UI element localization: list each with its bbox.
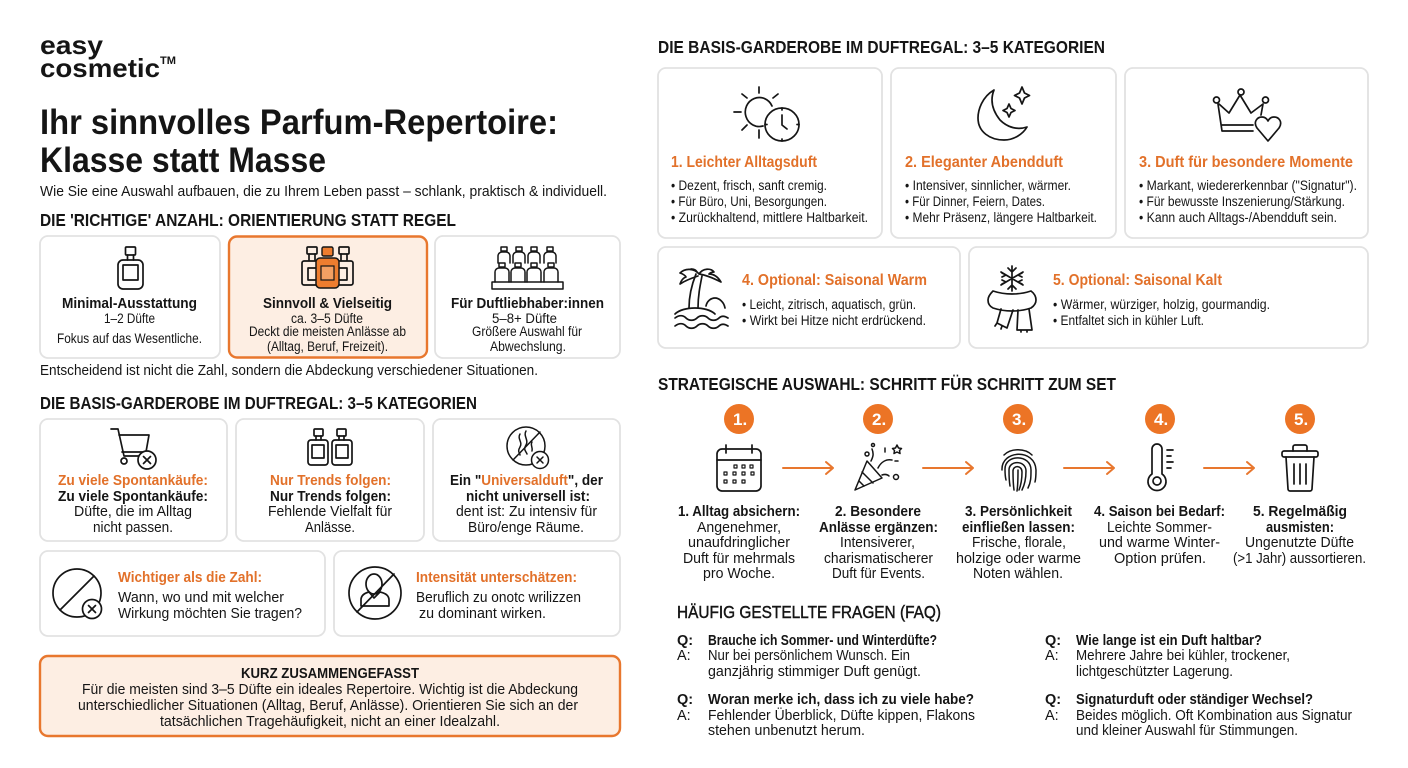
text: spontankaeufe (58, 472, 208, 536)
faq: zu viele: Fehlender Überblick, Düfte kippen, Flakons (708, 706, 975, 724)
text: duftliebhaber title: Für Duftliebhaber:innen (451, 295, 604, 312)
text: universalduft: Büro/enge Räume. (468, 520, 584, 536)
faq: signaturduft: und kleiner Auswahl für Stimmungen. (1076, 723, 1298, 739)
text: wichtiger: Wichtiger als die Zahl: (118, 569, 262, 586)
text: alltagsduft: • Für Büro, Uni, Besorgungen. (671, 194, 827, 209)
text: duftliebhaber description: Abwechslung. (490, 339, 566, 354)
text: universalduft (450, 472, 603, 536)
text: step 5: ausmisten: (1266, 519, 1334, 536)
text: intensitaet (416, 569, 581, 622)
text: step 5: Ungenutzte Düfte (1245, 535, 1354, 551)
title: Ihr sinnvolles Parfum-Repertoire: (40, 103, 558, 142)
panel: sinnvoll und vielseitig (229, 236, 427, 358)
text: abendduft (905, 154, 1097, 225)
panel: intensitaet unterschaetzen (334, 551, 620, 636)
text: step 2: Duft für Events. (832, 566, 925, 582)
icon: slashed person (349, 567, 401, 619)
text: step 1: Duft für mehrmals (683, 551, 795, 567)
icon: shopping cart with x (111, 429, 156, 469)
step 5 (1233, 404, 1366, 567)
icon: crossed scent waves (507, 427, 548, 468)
text: abendduft: • Intensiver, sinnlicher, wärmer. (905, 178, 1071, 193)
text: abendduft: • Mehr Präsenz, längere Haltbarkeit. (905, 210, 1097, 225)
text: step 3 (956, 503, 1081, 582)
text: warm: 4. Optional: Saisonal Warm (742, 272, 927, 289)
faq: sommer und winter: Nur bei persönlichem Wunsch. Ein (708, 648, 910, 664)
text: spontankaeufe: nicht passen. (93, 520, 173, 536)
icon: two bottles (308, 429, 352, 465)
faq: haltbarkeit: Mehrere Jahre bei kühler, trockener, (1076, 648, 1290, 664)
text: step 4: 4. Saison bei Bedarf: (1094, 503, 1225, 520)
faq: signaturduft: A: (1045, 708, 1059, 724)
text: spontankaeufe: Zu viele Spontankäufe: (58, 488, 208, 505)
faq: sommer und winter: ganzjährig stimmiger Duft genügt. (708, 664, 921, 680)
heading: basis-garderobe links: DIE BASIS-GARDEROBE IM DUFTREGAL: 3–5 KATEGORIEN (40, 393, 477, 413)
icon: calendar (717, 445, 761, 491)
text: duftliebhaber description: Größere Auswahl für (472, 324, 582, 339)
faq: sommer und winter: A: (677, 648, 691, 664)
faq: signaturduft: Signaturduft oder ständiger Wechsel? (1076, 692, 1313, 708)
text: alltagsduft: 1. Leichter Alltagsduft (671, 154, 817, 171)
text: warm: • Wirkt bei Hitze nicht erdrückend. (742, 313, 926, 328)
text: universalduft: Ein "Universalduft", der (450, 472, 603, 489)
text: step 3: einfließen lassen: (962, 519, 1075, 536)
faq: zu viele: A: (677, 708, 691, 724)
text: step 2 (819, 503, 938, 582)
badge 2: 2. (872, 410, 886, 429)
text: intensitaet: zu dominant wirken. (419, 606, 546, 622)
text: step 3: 3. Persönlichkeit (965, 503, 1072, 520)
logo: easy cosmetic: cosmetic (40, 53, 160, 83)
faq: signaturduft (1045, 692, 1352, 739)
heading: basis-garderobe rechts: DIE BASIS-GARDEROBE IM DUFTREGAL: 3–5 KATEGORIEN (658, 37, 1105, 57)
heading: strategische auswahl: STRATEGISCHE AUSWAHL: SCHRITT FÜR SCHRITT ZUM SET (658, 374, 1116, 394)
text: alltagsduft (671, 154, 868, 225)
panel: kurz zusammengefasst (40, 656, 620, 736)
icon: bottle shelf (492, 247, 563, 289)
title: Klasse statt Masse (40, 141, 326, 180)
faq: zu viele: Q: (677, 692, 693, 708)
icon: crown and heart (1214, 89, 1281, 141)
panel: duft fuer besondere momente (1125, 68, 1368, 238)
panel: spontankaeufe (40, 419, 227, 541)
badge 2 (863, 404, 893, 434)
arrow 1 (783, 462, 833, 474)
logo: easy cosmetic: easy (40, 30, 104, 60)
text: sinnvoll count: ca. 3–5 Düfte (291, 311, 363, 326)
text: nur trends: Fehlende Vielfalt für (268, 504, 392, 520)
heading: faq: HÄUFIG GESTELLTE FRAGEN (FAQ) (677, 602, 941, 622)
panel: minimal-ausstattung (40, 236, 220, 358)
faq: zu viele: Woran merke ich, dass ich zu viele habe? (708, 692, 974, 708)
faq: zu viele: stehen unbenutzt herum. (708, 723, 865, 739)
icon: fingerprint (1002, 450, 1036, 491)
text: step 4: und warme Winter- (1099, 535, 1220, 551)
text: minimal count: 1–2 Düfte (104, 311, 155, 326)
text: spontankaeufe: Düfte, die im Alltag (74, 504, 192, 520)
faq: zu viele (677, 692, 975, 739)
text: sinnvoll description: Deckt die meisten Anlässe ab (249, 324, 406, 339)
text: nur trends (268, 472, 392, 536)
heading: die richtige anzahl: DIE 'RICHTIGE' ANZAHL: ORIENTIERUNG STATT REGEL (40, 210, 456, 230)
faq: sommer und winter: Brauche ich Sommer- und Winterdüfte? (708, 633, 937, 649)
faq: haltbarkeit: Wie lange ist ein Duft haltbar? (1076, 633, 1262, 649)
icon: snowflake and scarf (988, 266, 1036, 332)
panel: wichtiger als die zahl (40, 551, 325, 636)
text: summary body: unterschiedlicher Situationen (Alltag, Beruf, Anlässe). Orientieren Sie sich an der (78, 698, 578, 714)
text: step 3: Frische, florale, (972, 535, 1066, 551)
text: step 4: Option prüfen. (1114, 551, 1206, 567)
text: step 1: pro Woche. (703, 566, 775, 582)
text: step 3: holzige oder warme (956, 551, 1081, 567)
text: step 3: Noten wählen. (973, 566, 1063, 582)
text: abendduft: 2. Eleganter Abendduft (905, 154, 1063, 171)
text: step 2: Intensiverer, (840, 535, 915, 551)
text: kalt: • Entfaltet sich in kühler Luft. (1053, 313, 1204, 328)
text: step 5: 5. Regelmäßig (1253, 503, 1347, 520)
text: universalduft: nicht universell ist: (466, 488, 590, 505)
text: sinnvoll description: (Alltag, Beruf, Freizeit). (267, 339, 388, 354)
icon: three bottles (302, 247, 353, 288)
icon: palm island (675, 269, 728, 328)
badge 3: 3. (1012, 410, 1026, 429)
text: kalt: 5. Optional: Saisonal Kalt (1053, 272, 1222, 289)
panel: universalduft (433, 419, 620, 541)
text: summary body: tatsächlichen Tragehäufigkeit, nicht an einer Idealzahl. (160, 714, 500, 730)
arrow 3 (1064, 462, 1114, 474)
text: kalt: • Wärmer, würziger, holzig, gourmandig. (1053, 297, 1270, 312)
text: minimal title: Minimal-Ausstattung (62, 295, 197, 312)
text: alltagsduft: • Dezent, frisch, sanft cremig. (671, 178, 827, 193)
panel: nur trends folgen (236, 419, 424, 541)
text: warm: • Leicht, zitrisch, aquatisch, grün. (742, 297, 916, 312)
text: step 2: 2. Besondere (835, 503, 921, 520)
text: step 5 (1233, 503, 1366, 567)
step 2 (819, 404, 938, 582)
text: besondere momente: • Markant, wiedererkennbar ("Signatur"). (1139, 178, 1357, 193)
badge 4: 4. (1154, 410, 1168, 429)
text: sinnvoll description (249, 324, 406, 354)
faq: sommer und winter (677, 633, 937, 680)
badge 5 (1285, 404, 1315, 434)
faq: signaturduft: Beides möglich. Oft Kombination aus Signatur (1076, 708, 1352, 724)
badge 1 (724, 404, 754, 434)
text: wichtiger (118, 569, 302, 622)
text: universalduft: dent ist: Zu intensiv für (456, 504, 597, 520)
text: step 1: unaufdringlicher (688, 535, 790, 551)
text: nur trends: Nur Trends folgen: (270, 488, 391, 505)
icon: moon and stars (978, 87, 1030, 140)
text: summary heading: KURZ ZUSAMMENGEFASST (241, 666, 419, 682)
text: summary body: Für die meisten sind 3–5 Düfte ein ideales Repertoire. Wichtig ist die Abdeckung (82, 682, 578, 698)
panel: saisonal warm (658, 247, 960, 348)
text: minimal description: Fokus auf das Wesentliche. (57, 331, 202, 346)
faq: sommer und winter: Q: (677, 633, 693, 649)
icon: sun and clock (734, 87, 799, 141)
logo: easy cosmetic: TM (160, 55, 176, 67)
note: abdeckung: Entscheidend ist nicht die Zahl, sondern die Abdeckung verschiedener Situationen. (40, 363, 538, 379)
badge 1: 1. (733, 410, 747, 429)
text: duftliebhaber count: 5–8+ Düfte (492, 311, 557, 326)
text: step 5: (>1 Jahr) aussortieren. (1233, 551, 1366, 567)
faq: haltbarkeit: A: (1045, 648, 1059, 664)
step 3 (956, 404, 1081, 582)
panel: saisonal kalt (969, 247, 1368, 348)
panel: leichter alltagsduft (658, 68, 882, 238)
text: besondere momente: • Für bewusste Inszenierung/Stärkung. (1139, 194, 1345, 209)
faq: haltbarkeit: Q: (1045, 633, 1061, 649)
icon: party popper (855, 444, 902, 490)
text: warm (742, 272, 927, 328)
step 1 (678, 404, 800, 582)
text: nur trends: Anlässe. (305, 520, 355, 536)
icon: thermometer (1148, 444, 1173, 490)
text: duftliebhaber description (472, 324, 582, 354)
text: wichtiger: Wann, wo und mit welcher (118, 590, 284, 606)
text: alltagsduft: • Zurückhaltend, mittlere Haltbarkeit. (671, 210, 868, 225)
text: step 1: 1. Alltag absichern: (678, 503, 800, 520)
text: spontankaeufe: Zu viele Spontankäufe: (58, 472, 208, 489)
logo: easy cosmetic (40, 30, 176, 83)
text: besondere momente: • Kann auch Alltags-/Abendduft sein. (1139, 210, 1337, 225)
icon: slashed circle (53, 569, 102, 618)
icon: trash can (1282, 445, 1318, 491)
faq: haltbarkeit: lichtgeschützter Lagerung. (1076, 664, 1233, 680)
panel: eleganter abendduft (891, 68, 1116, 238)
faq: signaturduft: Q: (1045, 692, 1061, 708)
step 4 (1094, 404, 1225, 567)
text: kalt (1053, 272, 1270, 328)
text: nur trends: Nur Trends folgen: (270, 472, 391, 489)
badge 4 (1145, 404, 1175, 434)
badge 3 (1003, 404, 1033, 434)
text: abendduft: • Für Dinner, Feiern, Dates. (905, 194, 1045, 209)
text: step 1: Angenehmer, (697, 520, 781, 536)
badge 5: 5. (1294, 410, 1308, 429)
title (40, 103, 558, 180)
text: sinnvoll title: Sinnvoll & Vielseitig (263, 295, 392, 312)
faq: haltbarkeit (1045, 633, 1290, 680)
icon: single bottle (118, 247, 143, 289)
panel: fuer duftliebhaber (435, 236, 620, 358)
text: intensitaet: Beruflich zu onotc wrilizzen (416, 590, 581, 606)
text: besondere momente (1139, 154, 1357, 225)
subtitle: Wie Sie eine Auswahl aufbauen, die zu Ihrem Leben passt – schlank, praktisch & individuell. (40, 183, 607, 200)
text: step 2: Anlässe ergänzen: (819, 519, 938, 536)
text: step 4 (1094, 503, 1225, 567)
text: step 1 (678, 503, 800, 582)
text: step 4: Leichte Sommer- (1107, 520, 1212, 536)
text: step 2: charismatischerer (824, 551, 933, 567)
text: intensitaet: Intensität unterschätzen: (416, 569, 577, 586)
text: besondere momente: 3. Duft für besondere Momente (1139, 154, 1353, 171)
text: wichtiger: Wirkung möchten Sie tragen? (118, 606, 302, 622)
text: summary body (78, 682, 578, 730)
arrow 2 (923, 462, 973, 474)
arrow 4 (1204, 462, 1254, 474)
